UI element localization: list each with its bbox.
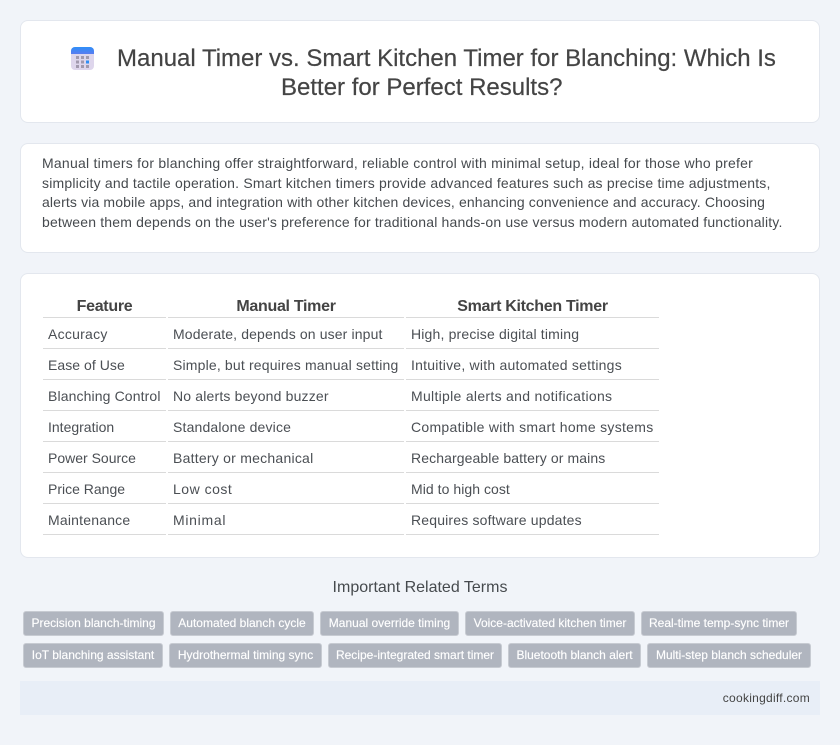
tag [169, 643, 322, 668]
summary text [42, 155, 783, 230]
tag: Manual override timing [329, 616, 450, 630]
comparison table: Moderate, depends on user input [173, 326, 383, 342]
comparison table: Ease of Use [48, 357, 125, 373]
comparison table: Compatible with smart home systems [411, 419, 654, 435]
summary text: simplicity and tactile operation. Smart kitchen timers provide advanced features such as precise time adjustments, [42, 175, 771, 191]
tag: Hydrothermal timing sync [178, 648, 313, 662]
panel: title card [20, 20, 820, 123]
tag: Multi-step blanch scheduler [656, 648, 802, 662]
panel: summary card [20, 143, 820, 253]
comparison table [43, 298, 659, 535]
comparison table: Accuracy [48, 326, 108, 342]
column header: Feature: Feature [77, 298, 132, 315]
related terms tags [23, 611, 811, 668]
comparison table: Requires software updates [411, 512, 582, 528]
tag [170, 611, 314, 636]
title: Better for Perfect Results? [281, 74, 562, 101]
tag: Bluetooth blanch alert [516, 648, 633, 662]
comparison table: Power Source [48, 450, 136, 466]
title: Manual Timer vs. Smart Kitchen Timer for Blanching: Which Is [117, 45, 776, 72]
comparison table: Integration [48, 419, 114, 435]
tag: Recipe-integrated smart timer [336, 648, 494, 662]
heading: important related terms: Important Related Terms [333, 579, 507, 596]
tag [320, 611, 459, 636]
comparison table: No alerts beyond buzzer [173, 388, 329, 404]
footer bar [20, 681, 820, 715]
tag [465, 611, 635, 636]
comparison table: High, precise digital timing [411, 326, 579, 342]
comparison table: Mid to high cost [411, 481, 510, 497]
comparison table: Low cost [173, 481, 232, 497]
summary text: alerts via mobile apps, and integration with other kitchen devices, enhancing convenience and accuracy. Choosing [42, 194, 765, 210]
tag [647, 643, 811, 668]
column header: Smart Kitchen Timer: Smart Kitchen Timer [457, 298, 608, 315]
comparison table: Price Range [48, 481, 125, 497]
icon: calendar timer [71, 47, 94, 70]
comparison table: Standalone device [173, 419, 291, 435]
tag: Voice-activated kitchen timer [474, 616, 626, 630]
comparison table: Simple, but requires manual setting [173, 357, 398, 373]
comparison table: Maintenance [48, 512, 130, 528]
tag [328, 643, 502, 668]
comparison table: Battery or mechanical [173, 450, 313, 466]
comparison table: Multiple alerts and notifications [411, 388, 612, 404]
tag: IoT blanching assistant [32, 648, 154, 662]
tag: Real-time temp-sync timer [649, 616, 789, 630]
panel: comparison table card [20, 273, 820, 558]
tag [641, 611, 797, 636]
tag: Precision blanch-timing [31, 616, 156, 630]
tag [23, 643, 163, 668]
summary text: Manual timers for blanching offer straightforward, reliable control with minimal setup, ideal for those who prefer [42, 155, 753, 171]
comparison table: Rechargeable battery or mains [411, 450, 605, 466]
title [117, 45, 776, 101]
tag: Automated blanch cycle [178, 616, 306, 630]
footer source: cookingdiff.com [723, 691, 810, 705]
tag [508, 643, 641, 668]
comparison table: Blanching Control [48, 388, 161, 404]
summary text: between them depends on the user's preference for traditional hands-on use versus modern automated functionality. [42, 214, 783, 230]
tag [23, 611, 164, 636]
comparison table: Intuitive, with automated settings [411, 357, 622, 373]
comparison table: Minimal [173, 512, 226, 528]
column header: Manual Timer: Manual Timer [236, 298, 336, 315]
